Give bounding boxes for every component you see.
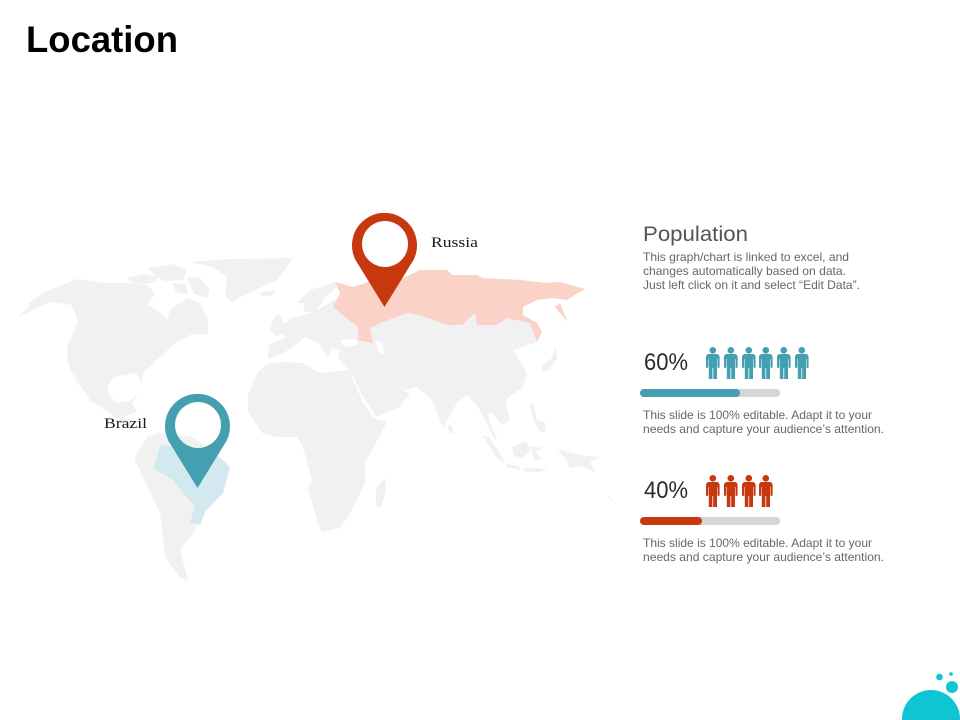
text: needs and capture your audience’s attention. <box>643 422 884 436</box>
text: This slide is 100% editable. Adapt it to your <box>643 536 872 550</box>
label: Russia: Russia <box>431 235 478 251</box>
pin: Russia <box>352 213 478 307</box>
title: Location <box>26 19 178 60</box>
population description: Just left click on it and select “Edit Data”. <box>643 278 860 292</box>
value: 40%: 40% <box>644 477 688 504</box>
value: 60%: 60% <box>644 349 688 376</box>
world map <box>18 258 614 580</box>
progress bar: 40% <box>640 517 780 525</box>
progress bar: 60% <box>640 389 780 397</box>
map: land masses <box>18 258 614 580</box>
icon: four people <box>706 475 773 507</box>
pin: Brazil <box>104 394 230 488</box>
map: inland seas <box>340 339 385 356</box>
population description <box>643 250 860 292</box>
text: This slide is 100% editable. Adapt it to your <box>643 408 872 422</box>
stat: 60% <box>640 347 884 436</box>
map: Brazil highlight <box>153 445 230 525</box>
decorative bubbles <box>902 672 960 720</box>
population description: changes automatically based on data. <box>643 264 846 278</box>
population description: This graph/chart is linked to excel, and <box>643 250 849 264</box>
map: Russia highlight <box>333 270 585 343</box>
text <box>643 536 884 564</box>
stat: 40% <box>640 475 884 564</box>
population heading: Population <box>643 223 748 246</box>
text <box>643 408 884 436</box>
label: Brazil: Brazil <box>104 416 147 432</box>
icon: six people <box>706 347 809 379</box>
text: needs and capture your audience’s attention. <box>643 550 884 564</box>
